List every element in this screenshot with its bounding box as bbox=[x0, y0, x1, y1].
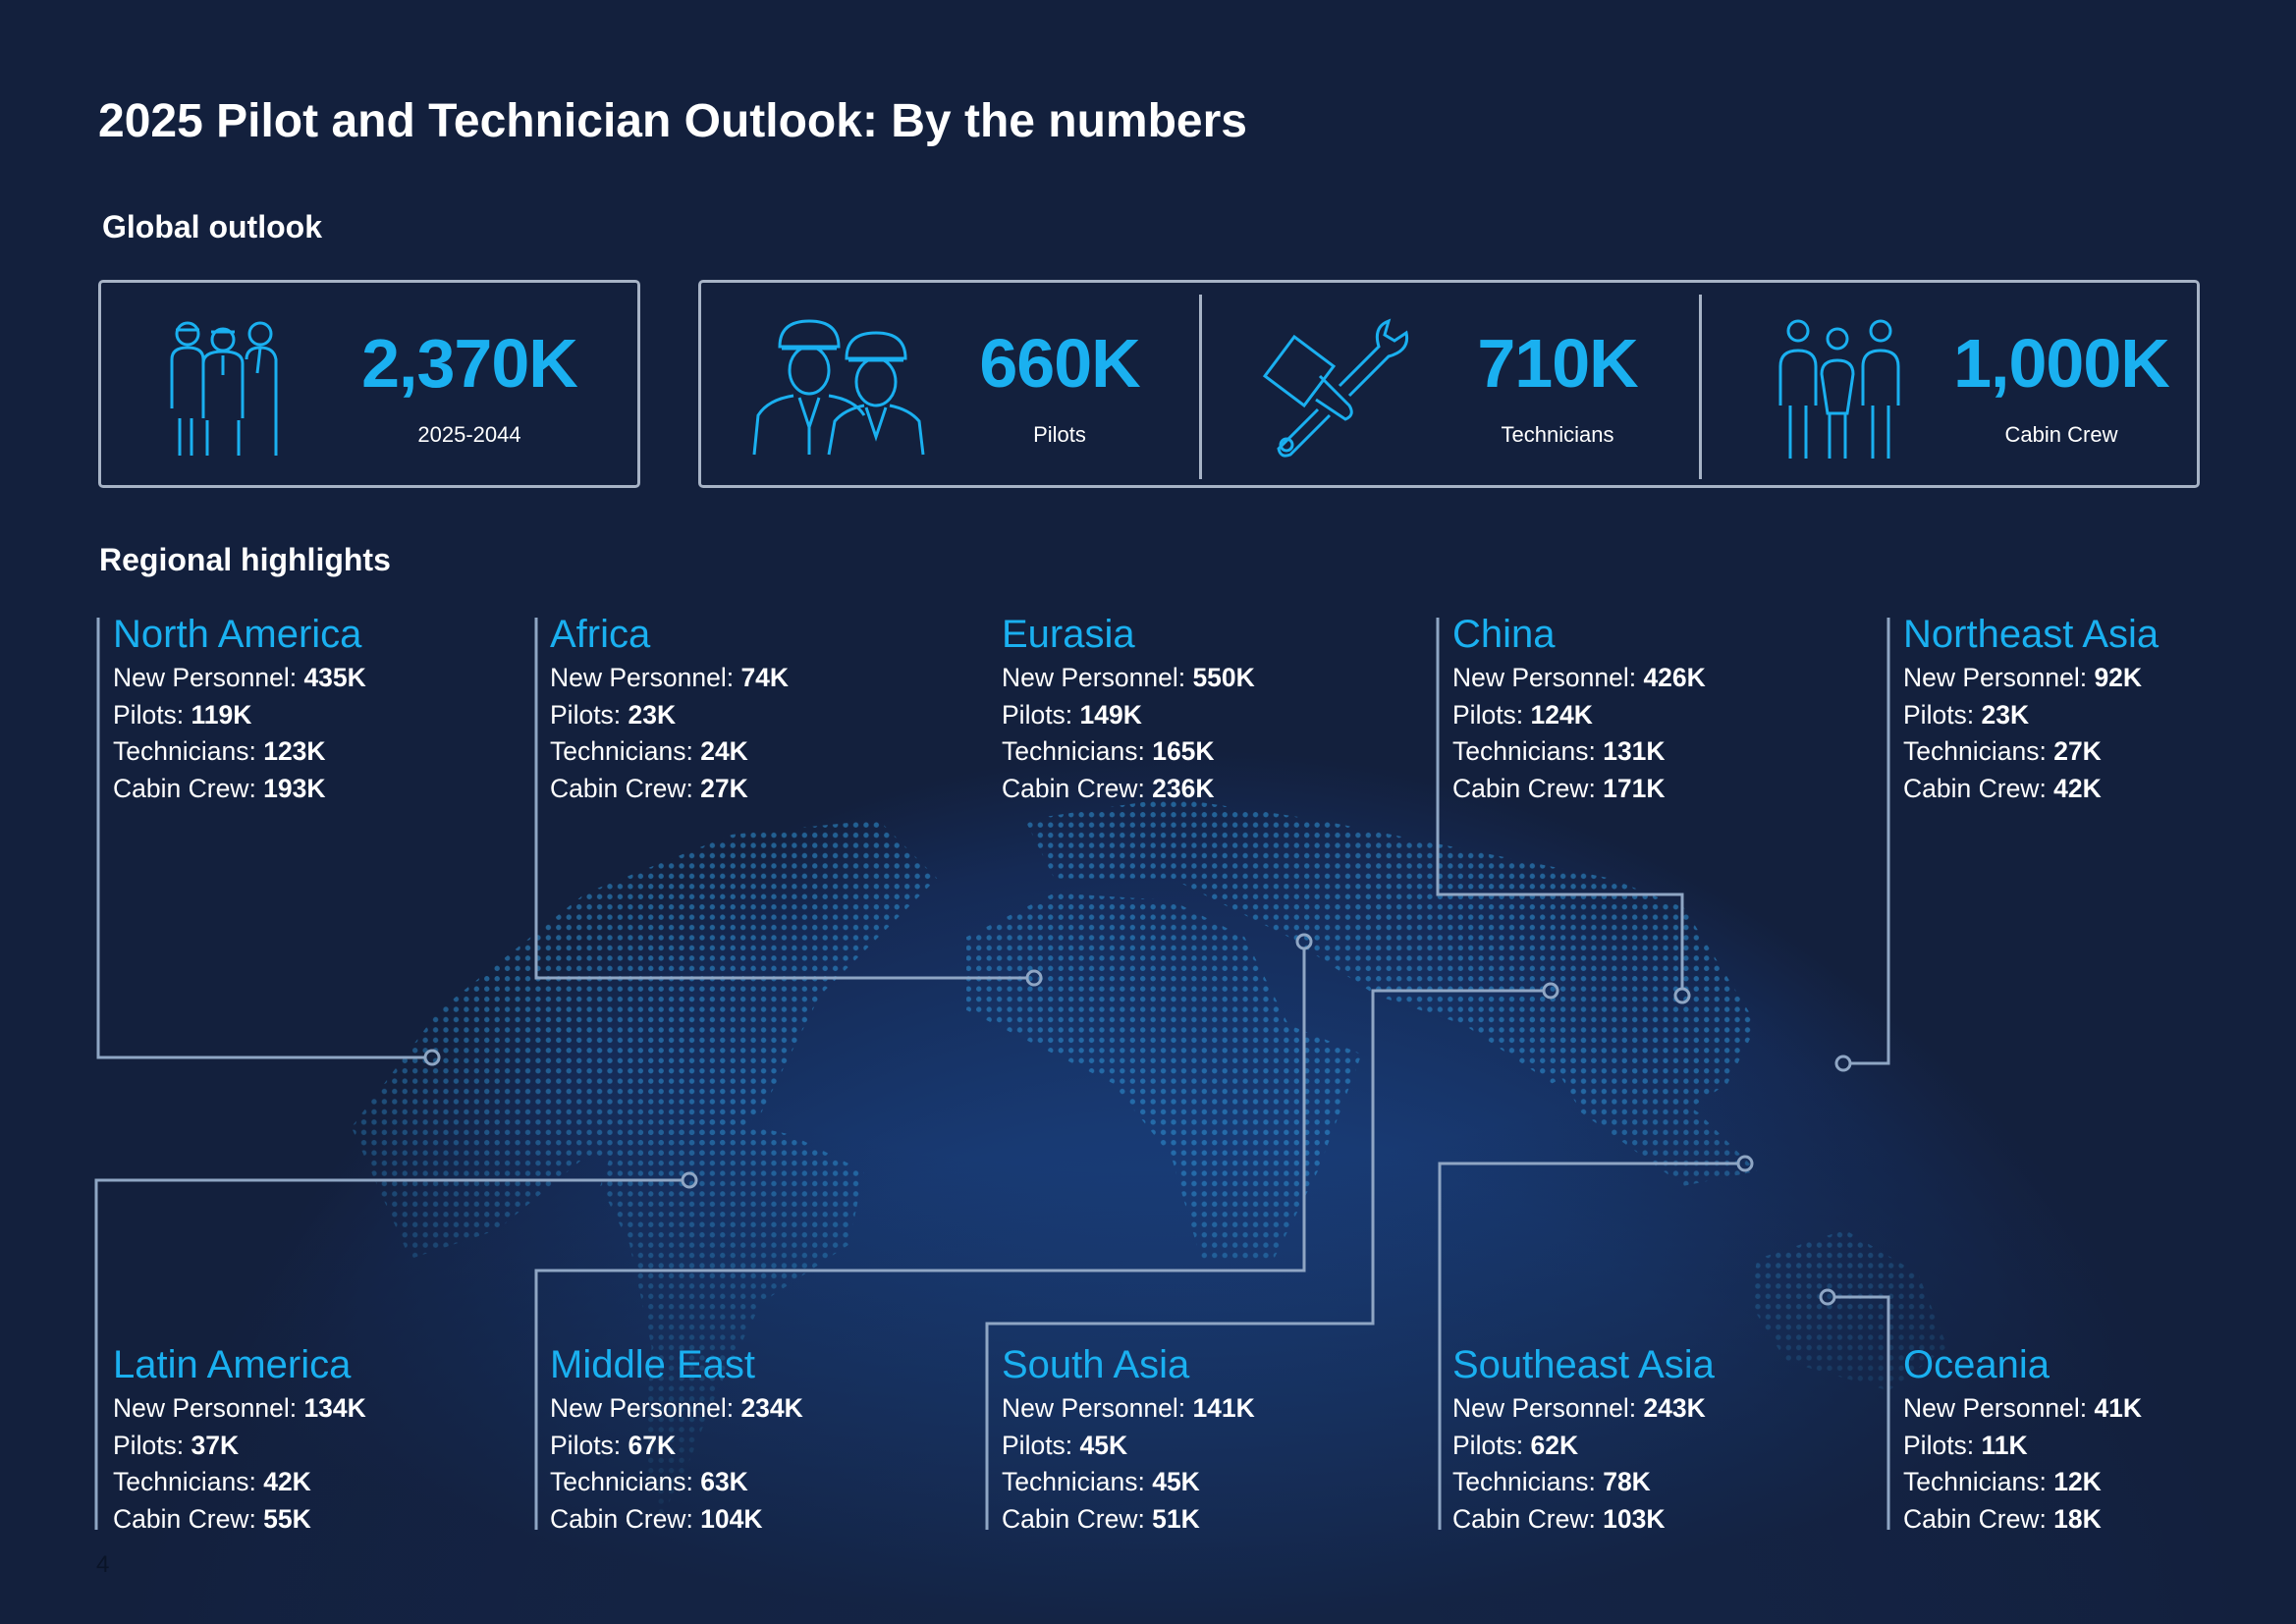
region: China bbox=[1452, 613, 1706, 803]
region: Oceania: New Personnel: 41K bbox=[1903, 1393, 2142, 1423]
region: Latin America: Latin America bbox=[113, 1343, 351, 1386]
region: North America: Pilots: 119K bbox=[113, 699, 251, 729]
region: China: Technicians: 131K bbox=[1452, 736, 1666, 766]
region: Middle East: Cabin Crew: 104K bbox=[550, 1504, 763, 1534]
region: South Asia: Pilots: 45K bbox=[1002, 1430, 1127, 1459]
region: South Asia: New Personnel: 141K bbox=[1002, 1393, 1255, 1423]
region: Latin America bbox=[113, 1343, 366, 1534]
region: North America: New Personnel: 435K bbox=[113, 663, 366, 692]
region: Africa: Cabin Crew: 27K bbox=[550, 774, 748, 803]
region: China: New Personnel: 426K bbox=[1452, 663, 1706, 692]
panel: workforce breakdown: Technicians bbox=[1502, 422, 1613, 447]
region: North America bbox=[113, 613, 366, 803]
region: Africa: Pilots: 23K bbox=[550, 699, 676, 729]
stat: 2370K: 2,370K bbox=[361, 325, 577, 402]
region: Oceania: Oceania bbox=[1903, 1343, 2050, 1386]
region: North America: Cabin Crew: 193K bbox=[113, 774, 326, 803]
region: Southeast Asia bbox=[1452, 1343, 1715, 1534]
region: South Asia bbox=[1002, 1343, 1255, 1534]
region: Eurasia: Cabin Crew: 236K bbox=[1002, 774, 1215, 803]
region: Southeast Asia: Cabin Crew: 103K bbox=[1452, 1504, 1666, 1534]
heading: regional highlights: Regional highlights bbox=[99, 542, 391, 577]
region: Southeast Asia: New Personnel: 243K bbox=[1452, 1393, 1706, 1423]
panel: workforce breakdown: Cabin Crew bbox=[2005, 422, 2117, 447]
region: Middle East bbox=[550, 1343, 803, 1534]
icon: cabin crew bbox=[1779, 320, 1899, 459]
region: China: China bbox=[1452, 613, 1556, 656]
region: Northeast Asia bbox=[1903, 613, 2159, 803]
region: China: Cabin Crew: 171K bbox=[1452, 774, 1666, 803]
region: Middle East: Technicians: 63K bbox=[550, 1467, 748, 1496]
region: Africa bbox=[550, 613, 789, 803]
panel: total: 2025-2044 bbox=[417, 422, 521, 447]
icon: pilots bbox=[752, 320, 925, 456]
region: Eurasia: Pilots: 149K bbox=[1002, 699, 1142, 729]
region: South Asia: South Asia bbox=[1002, 1343, 1189, 1386]
region: Oceania: Pilots: 11K bbox=[1903, 1430, 2028, 1459]
region: Northeast Asia: New Personnel: 92K bbox=[1903, 663, 2142, 692]
region: Oceania: Cabin Crew: 18K bbox=[1903, 1504, 2102, 1534]
region: Eurasia: Technicians: 165K bbox=[1002, 736, 1215, 766]
region: Latin America: Cabin Crew: 55K bbox=[113, 1504, 311, 1534]
region: Middle East: Middle East bbox=[550, 1343, 755, 1386]
region: Latin America: Pilots: 37K bbox=[113, 1430, 239, 1459]
icon: workers bbox=[171, 322, 277, 456]
region: Southeast Asia: Southeast Asia bbox=[1452, 1343, 1715, 1386]
panel: total bbox=[98, 280, 640, 488]
region: Africa: Africa bbox=[550, 613, 650, 656]
region: Middle East: Pilots: 67K bbox=[550, 1430, 676, 1459]
panel: workforce breakdown bbox=[698, 280, 2200, 488]
region: Eurasia bbox=[1002, 613, 1255, 803]
title: 2025 Pilot and Technician Outlook: By the numbers bbox=[98, 95, 1247, 147]
region: Oceania bbox=[1903, 1343, 2142, 1534]
region: Africa: New Personnel: 74K bbox=[550, 663, 789, 692]
region: Northeast Asia: Technicians: 27K bbox=[1903, 736, 2102, 766]
page number: 4 bbox=[96, 1551, 109, 1578]
heading: global outlook: Global outlook bbox=[102, 209, 322, 244]
stat: cabin crew: 1,000K bbox=[1953, 325, 2169, 402]
region: Middle East: New Personnel: 234K bbox=[550, 1393, 803, 1423]
stat: pilots: 660K bbox=[979, 325, 1140, 402]
stat: technicians: 710K bbox=[1477, 325, 1638, 402]
region: Latin America: Technicians: 42K bbox=[113, 1467, 311, 1496]
region: Latin America: New Personnel: 134K bbox=[113, 1393, 366, 1423]
region: Africa: Technicians: 24K bbox=[550, 736, 748, 766]
icon: wrench hand bbox=[1263, 318, 1408, 458]
region: South Asia: Technicians: 45K bbox=[1002, 1467, 1200, 1496]
region: North America: North America bbox=[113, 613, 361, 656]
region: China: Pilots: 124K bbox=[1452, 699, 1593, 729]
region: Southeast Asia: Pilots: 62K bbox=[1452, 1430, 1578, 1459]
region: South Asia: Cabin Crew: 51K bbox=[1002, 1504, 1200, 1534]
region: Eurasia: New Personnel: 550K bbox=[1002, 663, 1255, 692]
region: Southeast Asia: Technicians: 78K bbox=[1452, 1467, 1651, 1496]
region: Eurasia: Eurasia bbox=[1002, 613, 1135, 656]
panel: workforce breakdown: Pilots bbox=[1033, 422, 1086, 447]
region: Northeast Asia: Cabin Crew: 42K bbox=[1903, 774, 2102, 803]
region: Northeast Asia: Pilots: 23K bbox=[1903, 699, 2029, 729]
region: Northeast Asia: Northeast Asia bbox=[1903, 613, 2159, 656]
region: North America: Technicians: 123K bbox=[113, 736, 326, 766]
region: Oceania: Technicians: 12K bbox=[1903, 1467, 2102, 1496]
